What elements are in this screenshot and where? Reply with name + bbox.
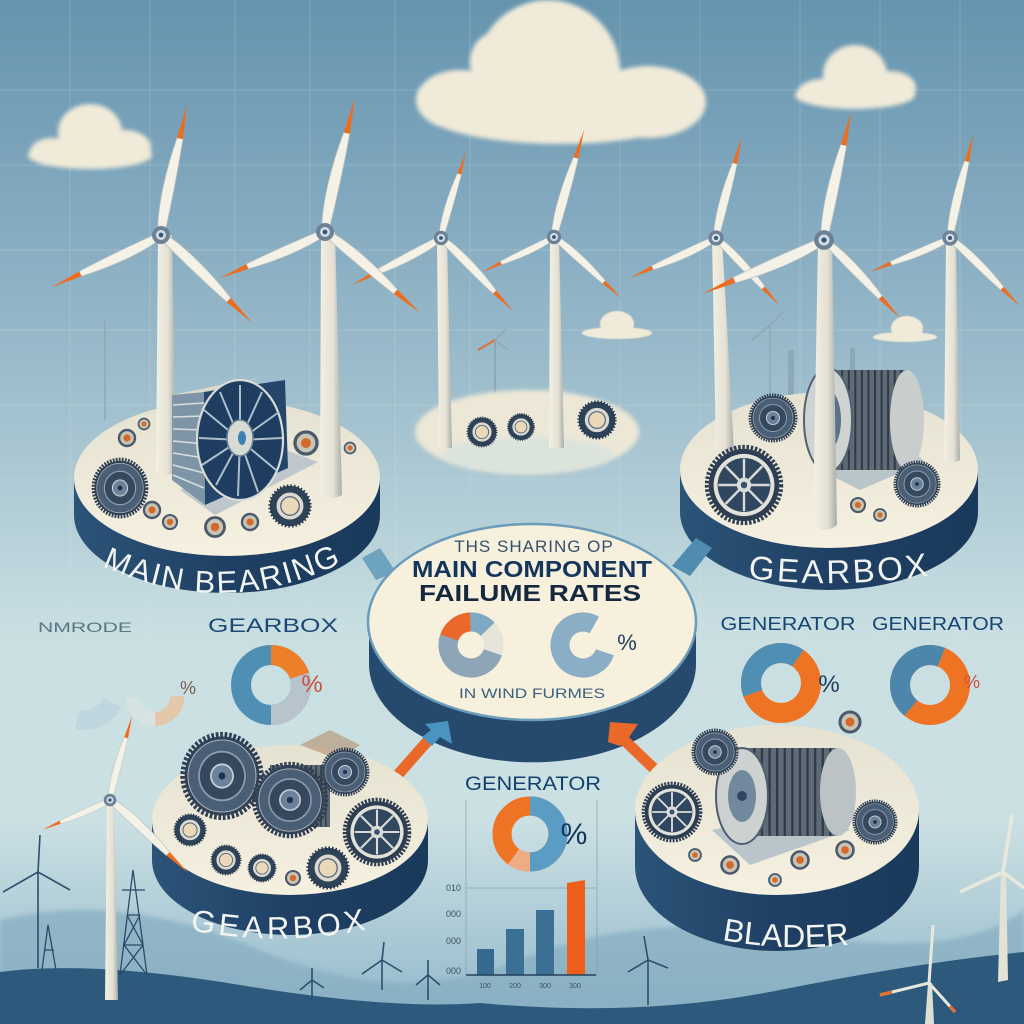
cloud: small right — [873, 316, 937, 342]
small horizon turbines — [3, 835, 668, 1005]
donut: right — [554, 616, 612, 674]
legend: generator donut — [720, 614, 856, 721]
connector: right — [672, 538, 712, 576]
label: faded nmrode: NMRODE — [38, 619, 132, 635]
platform top — [152, 745, 428, 895]
legend: generator donut right — [872, 614, 1004, 727]
label: main bearing: MAIN BEARING — [104, 547, 338, 593]
percent: % — [964, 672, 980, 692]
platform base — [680, 470, 978, 590]
turbine 8 bottom left — [41, 715, 192, 1000]
bars — [477, 949, 494, 975]
label: GEARBOX — [208, 616, 338, 637]
icon: gears group — [175, 730, 408, 888]
turbine 6 — [701, 110, 904, 530]
label: GENERATOR — [720, 614, 856, 634]
percent sign: % — [617, 630, 637, 655]
panel: gearbox top right — [630, 112, 1020, 590]
chart frame lines — [466, 800, 597, 975]
arrow: bottom right to centre — [608, 722, 668, 782]
panel: main bearing — [52, 98, 420, 593]
distant factory chimneys and turbines — [105, 312, 855, 420]
bar chart — [446, 880, 596, 990]
bottom hills — [0, 910, 1024, 1024]
platform base — [635, 810, 919, 951]
icon: gears — [709, 396, 938, 521]
turbine 5 — [629, 136, 784, 452]
heading line 2: MAIN COMPONENT — [412, 556, 652, 582]
pylons bottom left — [42, 870, 147, 975]
arrow: bottom left to centre — [388, 721, 452, 786]
platform base — [74, 478, 380, 593]
turbine 7 — [869, 133, 1024, 462]
turbine bottom right — [880, 815, 1024, 1024]
heading line 3: FAILUME RATES — [419, 580, 641, 606]
legend: gearbox donut — [208, 616, 338, 723]
small platform: centre background — [415, 390, 639, 474]
donut: left — [442, 616, 500, 674]
x labels: 100 — [479, 983, 491, 990]
turbine 2 — [218, 97, 425, 498]
donut — [233, 647, 309, 723]
x labels: 300 — [539, 983, 551, 990]
turbine 3 — [350, 150, 517, 448]
heading line 1: THS SHARING OP — [454, 537, 614, 556]
background grid — [0, 0, 1024, 740]
turbine 1 — [50, 103, 257, 475]
icon: bearing fan unit — [172, 378, 318, 515]
axis — [466, 974, 596, 976]
y labels: 000 — [446, 909, 461, 919]
icon: generator — [712, 748, 856, 865]
connector: left — [362, 548, 396, 580]
x labels: 300 — [569, 983, 581, 990]
y labels: 000 — [446, 936, 461, 946]
label: GENERATOR — [872, 614, 1004, 634]
caption: IN WIND FURMES — [459, 685, 605, 701]
y labels — [446, 883, 461, 976]
disc top — [368, 524, 696, 720]
label: blader: BLADER — [724, 918, 848, 948]
donut — [502, 806, 558, 862]
donut — [888, 643, 972, 727]
label: GENERATOR — [465, 774, 601, 795]
disc base — [369, 622, 696, 762]
panel: blader bottom right — [635, 710, 919, 951]
icon: gear wheels — [94, 418, 355, 536]
x labels: 200 — [509, 983, 521, 990]
cloud: top right — [795, 45, 916, 109]
platform top — [74, 400, 380, 556]
x labels — [479, 983, 581, 990]
legend: generator donut bottom — [465, 774, 601, 862]
label: gearbox: GEARBOX — [750, 553, 928, 584]
icon: generator — [804, 368, 925, 490]
turbine 4 — [481, 128, 625, 448]
platform top — [635, 725, 919, 895]
label: gearbox: GEARBOX — [193, 908, 366, 939]
panel: gearbox bottom left — [152, 730, 428, 939]
percent: % — [818, 671, 840, 698]
donut: faded centre left — [133, 675, 196, 719]
y labels: 000 — [446, 966, 461, 976]
cloud: top centre — [416, 0, 706, 144]
donut — [743, 645, 819, 721]
icon: gears — [645, 712, 895, 886]
platform top — [680, 392, 978, 548]
cloud: small centre — [582, 311, 652, 339]
cloud: top left — [28, 104, 152, 169]
donut: faded left — [45, 650, 125, 730]
y labels: 010 — [446, 883, 461, 893]
platform base — [152, 820, 428, 935]
percent: % — [561, 818, 587, 851]
percent: % — [301, 671, 323, 698]
donut: faded centre left: % — [180, 678, 196, 698]
panel: central title disc — [368, 524, 696, 762]
